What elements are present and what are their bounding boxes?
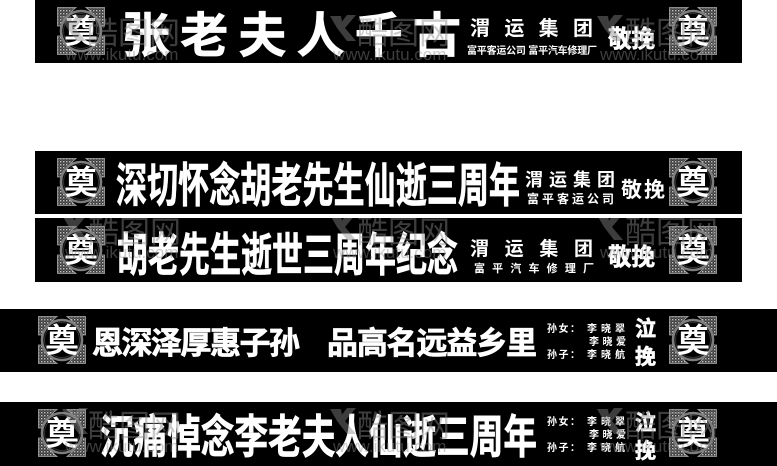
icon: left ornament <box>38 410 86 456</box>
watermark row: banner 5: 酷图网 <box>357 409 450 444</box>
icon: right ornament: 奠 <box>676 164 710 201</box>
text: mourners list: 孙子： <box>547 442 580 454</box>
panel: banner 5 <box>0 402 777 466</box>
watermark row: banner 3: 酷图网 <box>88 215 181 250</box>
watermark row: banner 5: www.ikutu.com <box>332 437 446 456</box>
text: company name: 渭运集团 <box>470 17 593 40</box>
watermark row: banner 5: www.ikutu.com <box>64 437 178 456</box>
watermark row: banner 1: www.ikutu.com <box>64 45 178 64</box>
text: mourners list: 李晓航 <box>587 441 625 454</box>
heading: banner 2 title: 深切怀念胡老先生仙逝三周年 <box>116 159 520 212</box>
heading: banner 1 title: 张老夫人千古 <box>122 10 461 63</box>
text: mourners list: 孙女： <box>547 322 580 335</box>
watermark row: banner 3: 酷图网 <box>357 215 450 250</box>
text: company subtitle: 富平客运公司 <box>527 191 614 206</box>
watermark row: banner 1: 酷图网 <box>357 16 450 51</box>
text: respectful tribute: 敬挽 <box>608 26 655 53</box>
watermark row: banner 1 <box>60 15 718 64</box>
text: mourners list: 李晓翠 <box>587 322 625 335</box>
icon: left ornament: 奠 <box>46 322 78 359</box>
watermark row: banner 5 <box>62 408 718 456</box>
text: mourners list: 李晓翠 <box>587 415 625 428</box>
icon: left ornament <box>38 316 86 364</box>
icon: left ornament <box>58 226 104 274</box>
watermark row: banner 3: 酷图网 <box>625 215 718 250</box>
heading: banner 4 couplet first line: 恩深泽厚惠子孙 <box>92 326 300 361</box>
panel: banner 2 <box>35 151 742 214</box>
panel: banner 1 <box>35 0 742 63</box>
icon: left ornament <box>58 8 104 54</box>
panel: banner 4 <box>0 309 777 372</box>
icon: right ornament <box>670 410 716 456</box>
text: mourners list: 李晓爱 <box>589 335 626 348</box>
text: respectful tribute: 敬挽 <box>608 244 655 271</box>
text: mourners list: 孙子： <box>547 349 580 361</box>
text: company name: 渭运集团 <box>525 170 615 190</box>
watermark row: banner 3: www.ikutu.com <box>332 243 446 262</box>
heading: banner 4 couplet second line: 品高名远益乡里 <box>327 326 537 361</box>
icon: right ornament: 奠 <box>676 415 710 452</box>
icon: right ornament <box>670 158 716 206</box>
text: weeping tribute: 泣 <box>635 411 656 435</box>
watermark row: banner 1: 酷图网 <box>625 16 718 51</box>
text: mourners list: 李晓航 <box>587 348 625 361</box>
icon: right ornament: 奠 <box>676 232 710 269</box>
watermark row: banner 1: www.ikutu.com <box>332 45 446 64</box>
watermark row: banner 1: www.ikutu.com <box>599 45 713 64</box>
text: weeping tribute: 挽 <box>635 346 656 369</box>
watermark row: banner 5: www.ikutu.com <box>599 437 713 456</box>
icon: left ornament: 奠 <box>46 415 78 452</box>
text: weeping tribute <box>635 317 656 369</box>
icon: left ornament: 奠 <box>64 164 98 201</box>
icon: right ornament: 奠 <box>676 13 710 50</box>
icon: right ornament: 奠 <box>676 322 710 359</box>
text: company subtitle: 富平客运公司 富平汽车修理厂 <box>467 44 597 57</box>
watermark row: banner 5: 酷图网 <box>625 409 718 444</box>
heading: banner 3 title: 胡老先生逝世三周年纪念 <box>117 229 458 281</box>
icon: left ornament: 奠 <box>64 13 98 50</box>
watermark row: banner 5: 酷图网 <box>88 409 181 444</box>
text: mourners list <box>547 322 626 361</box>
watermark row: banner 3: www.ikutu.com <box>599 243 713 262</box>
icon: right ornament <box>670 8 716 54</box>
icon: left ornament <box>58 158 104 206</box>
text: company subtitle: 富平汽车修理厂 <box>474 261 594 275</box>
text: mourners list: 孙女： <box>547 415 580 428</box>
text: weeping tribute: 泣 <box>635 317 656 341</box>
watermark row: banner 3 <box>64 218 716 258</box>
icon: right ornament <box>670 316 716 364</box>
text: weeping tribute: 挽 <box>635 440 656 463</box>
text: respectful tribute: 敬挽 <box>621 179 665 202</box>
text: weeping tribute <box>635 411 656 463</box>
heading: banner 5 title: 沉痛悼念李老夫人仙逝三周年 <box>100 411 537 463</box>
text: mourners list: 李晓爱 <box>589 428 626 441</box>
text: company name: 渭运集团 <box>470 238 593 260</box>
text: mourners list <box>547 415 626 454</box>
panel: banner 3 <box>35 218 742 282</box>
icon: right ornament <box>670 226 716 274</box>
watermark row: banner 3: www.ikutu.com <box>64 243 178 262</box>
watermark row: banner 1: 酷图网 <box>87 16 180 51</box>
icon: left ornament: 奠 <box>64 232 98 269</box>
